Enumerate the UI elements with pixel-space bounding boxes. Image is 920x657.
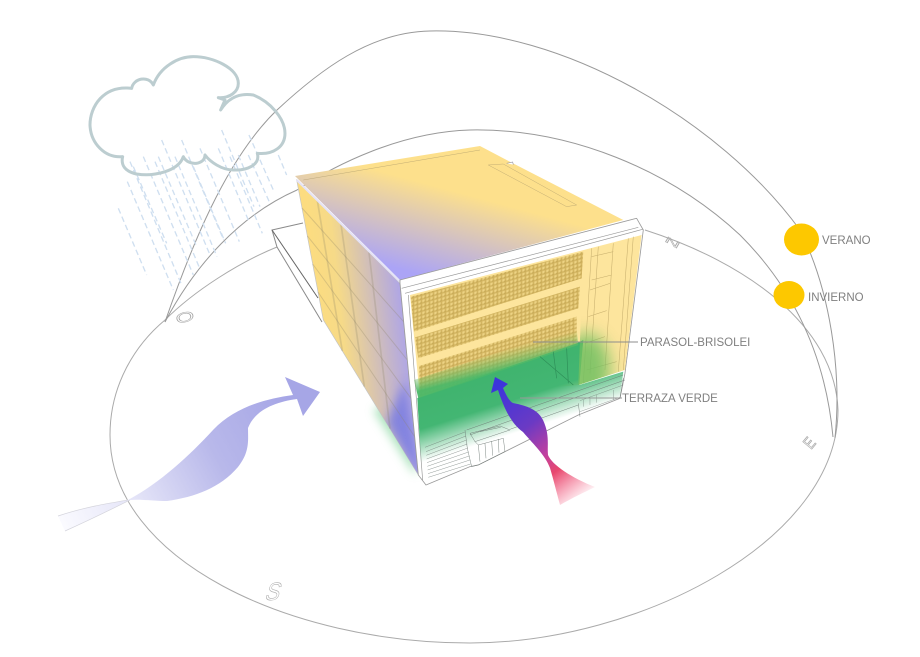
- label: parasol-brisolei: PARASOL-BRISOLEI: [640, 337, 750, 349]
- sun: summer: [784, 224, 819, 256]
- terrace green: [417, 340, 623, 485]
- compass letter S: S: [262, 578, 285, 606]
- front facade: [400, 218, 643, 485]
- terrace edge lines: [467, 375, 625, 435]
- compass letter N: N: [663, 234, 682, 251]
- ground floor: [425, 375, 625, 477]
- green fade on brise: [414, 327, 578, 398]
- entrance block: [465, 426, 510, 467]
- blue wind arrow: [58, 377, 320, 531]
- summer sun path arc: [165, 31, 837, 438]
- white frame: [400, 218, 643, 485]
- label: terraza verde: TERRAZA VERDE: [622, 393, 718, 405]
- brise soleil bands: [411, 252, 583, 397]
- sun: winter: [774, 281, 804, 309]
- roof: [295, 146, 623, 282]
- label lines: [520, 342, 638, 398]
- label: verano: VERANO: [822, 235, 871, 247]
- green fade on right column: [578, 324, 621, 385]
- right column windows: [583, 237, 633, 383]
- cloud: [90, 57, 285, 175]
- left facade: [297, 180, 422, 480]
- shutter: [425, 432, 471, 477]
- rain: [118, 130, 287, 290]
- frame lines: [402, 227, 643, 480]
- right block: [580, 385, 623, 412]
- label: invierno: INVIERNO: [808, 292, 864, 304]
- red to blue wind arrow: [491, 377, 595, 505]
- compass letter O: O: [174, 308, 196, 327]
- compass letter E: E: [800, 434, 820, 453]
- compass base ellipse: [110, 230, 838, 643]
- ground slab behind the building: [272, 223, 330, 322]
- terrace interior columns: [540, 348, 573, 385]
- winter sun path arc: [165, 130, 833, 437]
- recessed facade background: [410, 235, 642, 398]
- green glow at building foot: [373, 400, 420, 475]
- building: [295, 146, 643, 485]
